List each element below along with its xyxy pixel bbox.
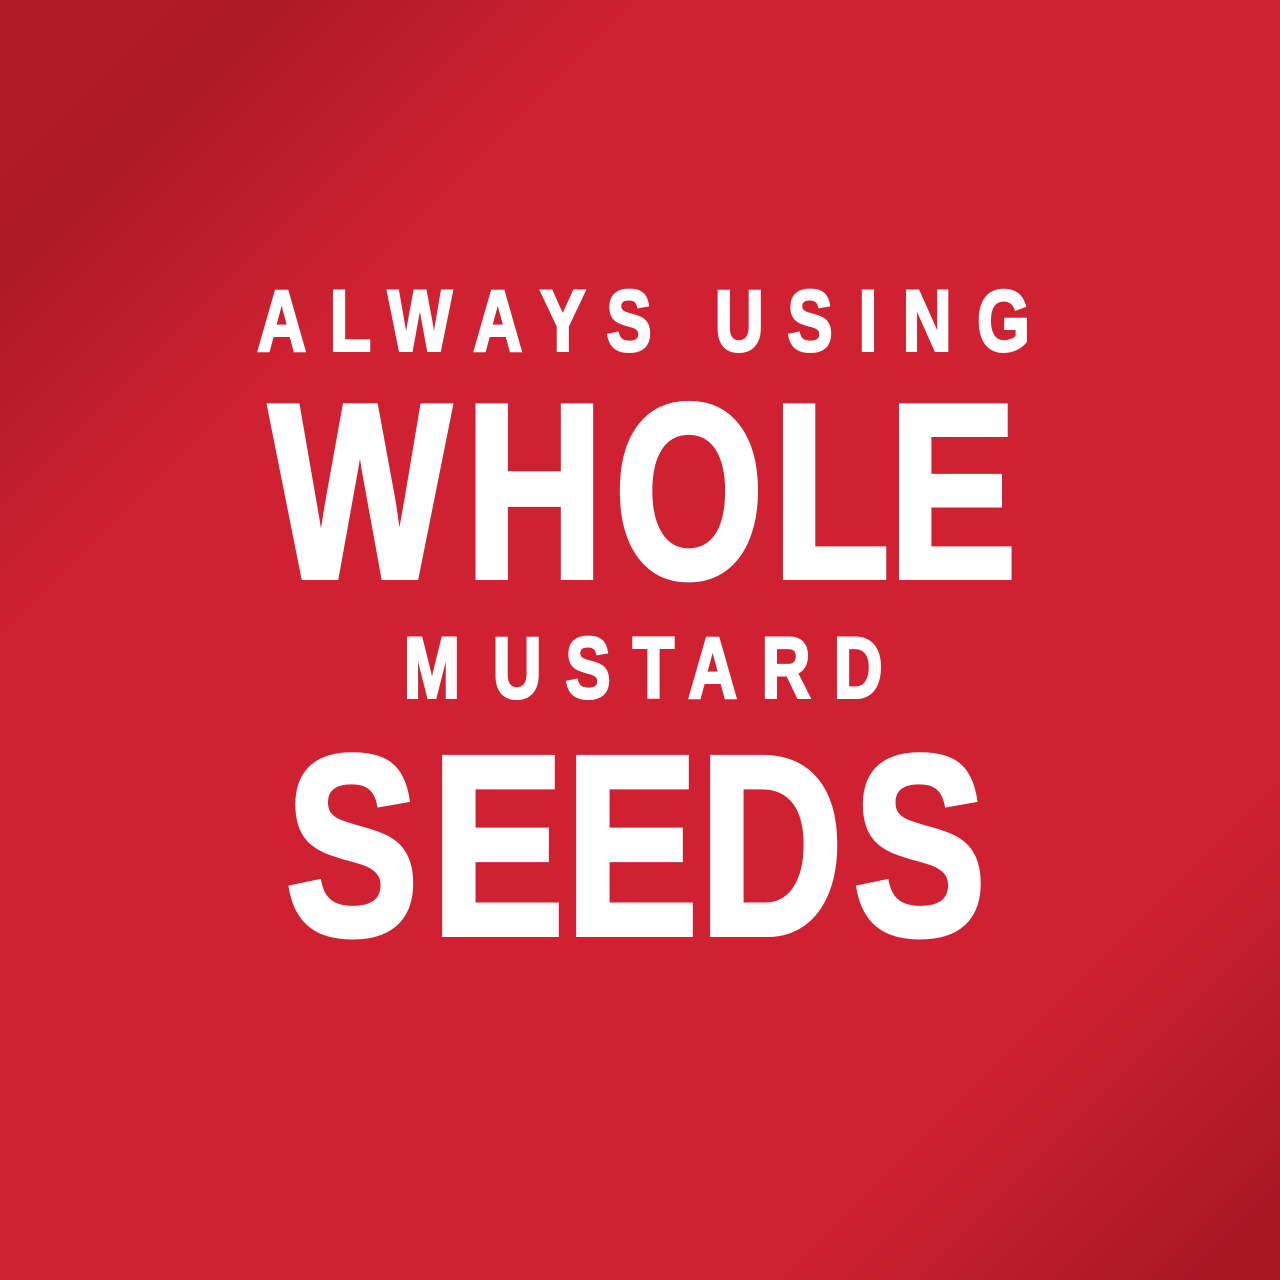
heading line: whole: WHOLE <box>269 353 1017 631</box>
heading line: seeds: SEEDS <box>285 702 986 989</box>
heading line: always using: ALWAYS USING <box>257 274 1030 369</box>
heading line: mustard: MUSTARD <box>404 621 883 716</box>
